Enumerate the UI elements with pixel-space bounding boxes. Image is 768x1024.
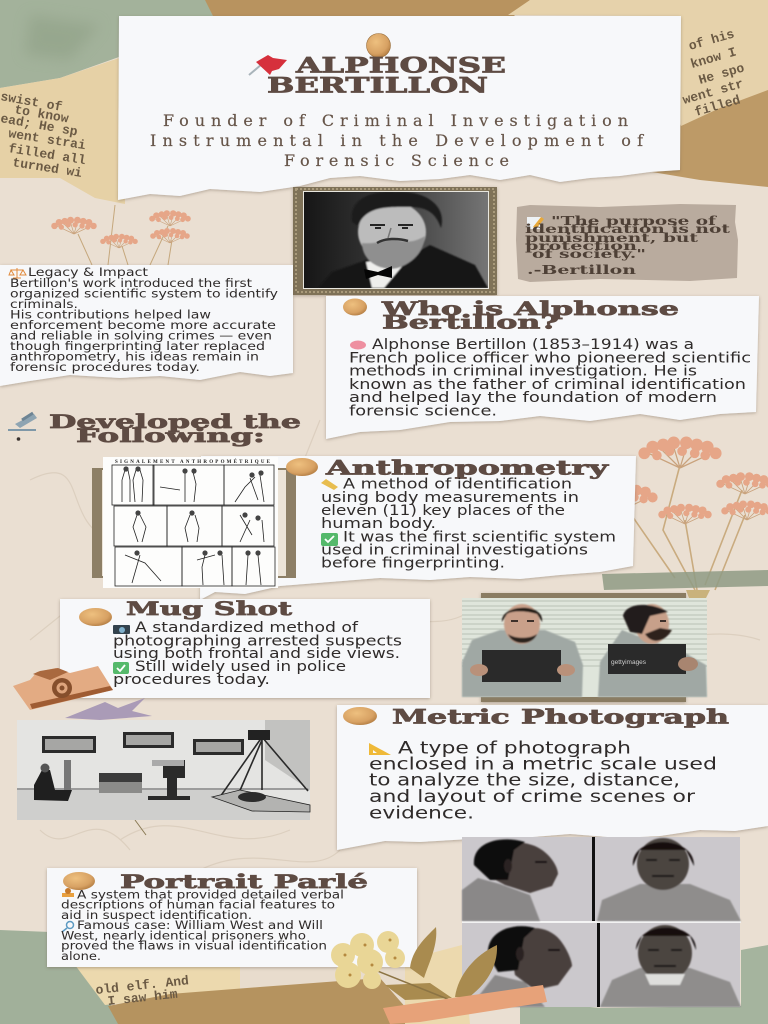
icon: ruler xyxy=(321,479,338,490)
body text: and helped lay the foundation of modern xyxy=(349,390,717,406)
subtitle: Forensic Science xyxy=(284,151,509,170)
background: top-collage papers: He spo xyxy=(697,60,746,88)
body text: used in criminal investigations xyxy=(321,542,588,558)
icon: coin xyxy=(343,298,367,316)
body text: procedures today. xyxy=(113,672,270,688)
upper left profile xyxy=(462,839,558,921)
subtitle: Instrumental in the Development of xyxy=(150,131,644,150)
icon: microscope xyxy=(8,413,37,441)
body text xyxy=(321,476,616,572)
panel: metric photograph xyxy=(337,704,768,850)
dried flowers: top left xyxy=(51,205,191,265)
body text: eleven (11) key places of the xyxy=(321,503,565,519)
legacy text: Bertillon's work introduced the first xyxy=(10,276,253,290)
body text: before fingerprinting. xyxy=(321,556,505,572)
body text xyxy=(349,337,751,420)
body text: A system that provided detailed verbal xyxy=(77,888,344,902)
panel: portrait parle xyxy=(47,868,417,967)
prisoner photos: william and will west xyxy=(462,837,741,1007)
panel: title card xyxy=(118,16,681,200)
body text: using both frontal and side views. xyxy=(113,646,400,662)
quote text: punishment, but xyxy=(525,231,699,245)
orange torn tape xyxy=(383,985,547,1024)
body text: known as the father of criminal identification xyxy=(349,377,746,393)
heading: Mug Shot xyxy=(126,598,292,620)
legacy text: forensic procedures today. xyxy=(10,360,200,374)
body text xyxy=(113,620,402,688)
icon: coin xyxy=(286,458,318,476)
quote text: identification is not xyxy=(525,222,731,236)
dried stem bundle xyxy=(686,590,710,614)
icon: camera with flash xyxy=(113,625,130,634)
quote text xyxy=(525,214,731,277)
background: top-collage papers: went str xyxy=(681,76,745,108)
background: top-collage papers: filled xyxy=(693,93,742,120)
body text: forensic science. xyxy=(349,404,497,420)
icon: brain xyxy=(350,340,366,350)
portrait photo in frame xyxy=(293,187,497,295)
icon: triangular ruler xyxy=(369,743,391,755)
panel: legacy and impact xyxy=(0,265,293,386)
legacy text: and reliable in solving crimes — even xyxy=(10,328,272,342)
lower left profile xyxy=(470,926,572,1007)
body text: aid in suspect identification. xyxy=(61,909,252,922)
title heading: BERTILLON xyxy=(267,72,488,98)
green tape xyxy=(602,570,768,590)
background: top-collage papers: know I xyxy=(689,45,738,72)
legacy text: anthropometry, his ideas remain in xyxy=(10,350,259,364)
icon: paper camera cutout xyxy=(13,666,113,710)
icon: coin xyxy=(79,608,112,626)
body text: A type of photograph xyxy=(398,738,631,758)
body text: and layout of crime scenes or xyxy=(369,787,695,806)
icon: pushpin xyxy=(249,55,287,75)
body text: It was the first scientific system xyxy=(343,530,616,546)
body text: Alphonse Bertillon (1853–1914) was a xyxy=(372,337,694,353)
quote text: .-Bertillon xyxy=(527,263,636,277)
heading: Metric Photograph xyxy=(392,704,730,728)
body text: to analyze the size, distance, xyxy=(369,770,680,790)
icon: magnifier xyxy=(62,922,74,932)
body text: using body measurements in xyxy=(321,490,579,506)
heading: Bertillon? xyxy=(382,312,559,334)
body text: West, nearly identical prisoners who xyxy=(61,930,306,942)
body text: Famous case: William West and Will xyxy=(77,919,323,932)
frame behind chart xyxy=(92,468,296,578)
subtitle: Founder of Criminal Investigation xyxy=(163,111,628,130)
quote card xyxy=(516,204,738,282)
section heading: developed the following: Developed the xyxy=(49,411,301,433)
anthropometric chart: SIGNALEMENT ANTHROPOMÉTRIQUE xyxy=(115,459,271,465)
title heading xyxy=(267,52,506,98)
lower right portrait xyxy=(600,925,741,1007)
body text: photographing arrested suspects xyxy=(113,634,402,650)
panel: who is alphonse bertillon xyxy=(326,296,759,439)
icon: coin xyxy=(366,34,390,58)
legacy text: enforcement become more accurate xyxy=(10,318,276,332)
body text: evidence. xyxy=(369,804,474,822)
background: top-collage papers: ead; He sp xyxy=(0,111,79,140)
background: top-collage papers: filled all xyxy=(7,141,87,168)
body text: A method of identification xyxy=(343,476,572,492)
panel: mug shot xyxy=(60,598,430,698)
body text: French police officer who pioneered scientific xyxy=(349,350,751,366)
icon: check mark xyxy=(113,662,129,674)
quote text: of society." xyxy=(532,247,646,261)
background: top-collage papers xyxy=(0,0,768,204)
icon: coin xyxy=(63,872,95,890)
body text: descriptions of human facial features to xyxy=(61,898,335,912)
heading xyxy=(380,298,679,334)
legacy text: though fingerprinting later replaced xyxy=(10,339,265,353)
body text: proved the flaws in visual identification xyxy=(61,940,327,952)
purple dried flower xyxy=(65,698,152,720)
upper right portrait xyxy=(597,838,741,921)
mug shot photo: gettyimages xyxy=(611,659,647,666)
legacy text: Legacy & Impact xyxy=(28,265,149,279)
body text: human body. xyxy=(321,516,436,532)
heading: Portrait Parlé xyxy=(120,871,368,893)
icon: coin xyxy=(343,707,377,725)
icon: memo xyxy=(527,217,544,229)
icon: scales xyxy=(9,268,26,278)
body text xyxy=(369,738,717,822)
lab photo: metric setup xyxy=(17,720,310,820)
background: top-collage papers: swist of xyxy=(0,89,64,115)
body text: enclosed in a metric scale used xyxy=(369,754,717,774)
legacy text: His contributions helped law xyxy=(10,308,211,322)
body text xyxy=(61,888,344,963)
subtitle xyxy=(150,111,644,170)
panel: anthropometry xyxy=(92,456,636,600)
body text: A standardized method of xyxy=(135,620,359,636)
heading: Anthropometry xyxy=(324,456,610,480)
section heading: developed the following xyxy=(8,411,301,447)
icon: detective xyxy=(62,888,74,897)
legacy text xyxy=(10,265,278,374)
body text: alone. xyxy=(61,950,101,963)
heading: Who is Alphonse xyxy=(380,298,679,320)
section heading: developed the following: Following: xyxy=(76,425,265,447)
anthropometric chart xyxy=(103,457,278,588)
mug shot photo xyxy=(462,593,707,702)
background: bottom-collage papers: old elf. And xyxy=(95,973,190,998)
icon: check mark xyxy=(321,533,338,546)
background: top-collage papers: of his xyxy=(687,26,736,54)
background: bottom-collage papers xyxy=(0,930,768,1024)
background: bottom-collage papers: I saw him xyxy=(107,987,178,1009)
dried flowers: right xyxy=(586,436,768,590)
title heading: ALPHONSE xyxy=(294,52,506,78)
background: top-collage papers: went strai xyxy=(7,126,87,153)
body text: methods in criminal investigation. He is xyxy=(349,364,697,380)
legacy text: organized scientific system to identify xyxy=(10,286,278,300)
pressed flowers and leaves xyxy=(331,927,497,1000)
body text: Still widely used in police xyxy=(135,659,346,675)
quote text: protection xyxy=(525,239,637,253)
background: top-collage papers: turned wi xyxy=(11,155,83,181)
legacy text: criminals. xyxy=(10,297,78,311)
quote text: "The purpose of xyxy=(551,214,717,228)
background: top-collage papers: to know xyxy=(13,102,70,126)
